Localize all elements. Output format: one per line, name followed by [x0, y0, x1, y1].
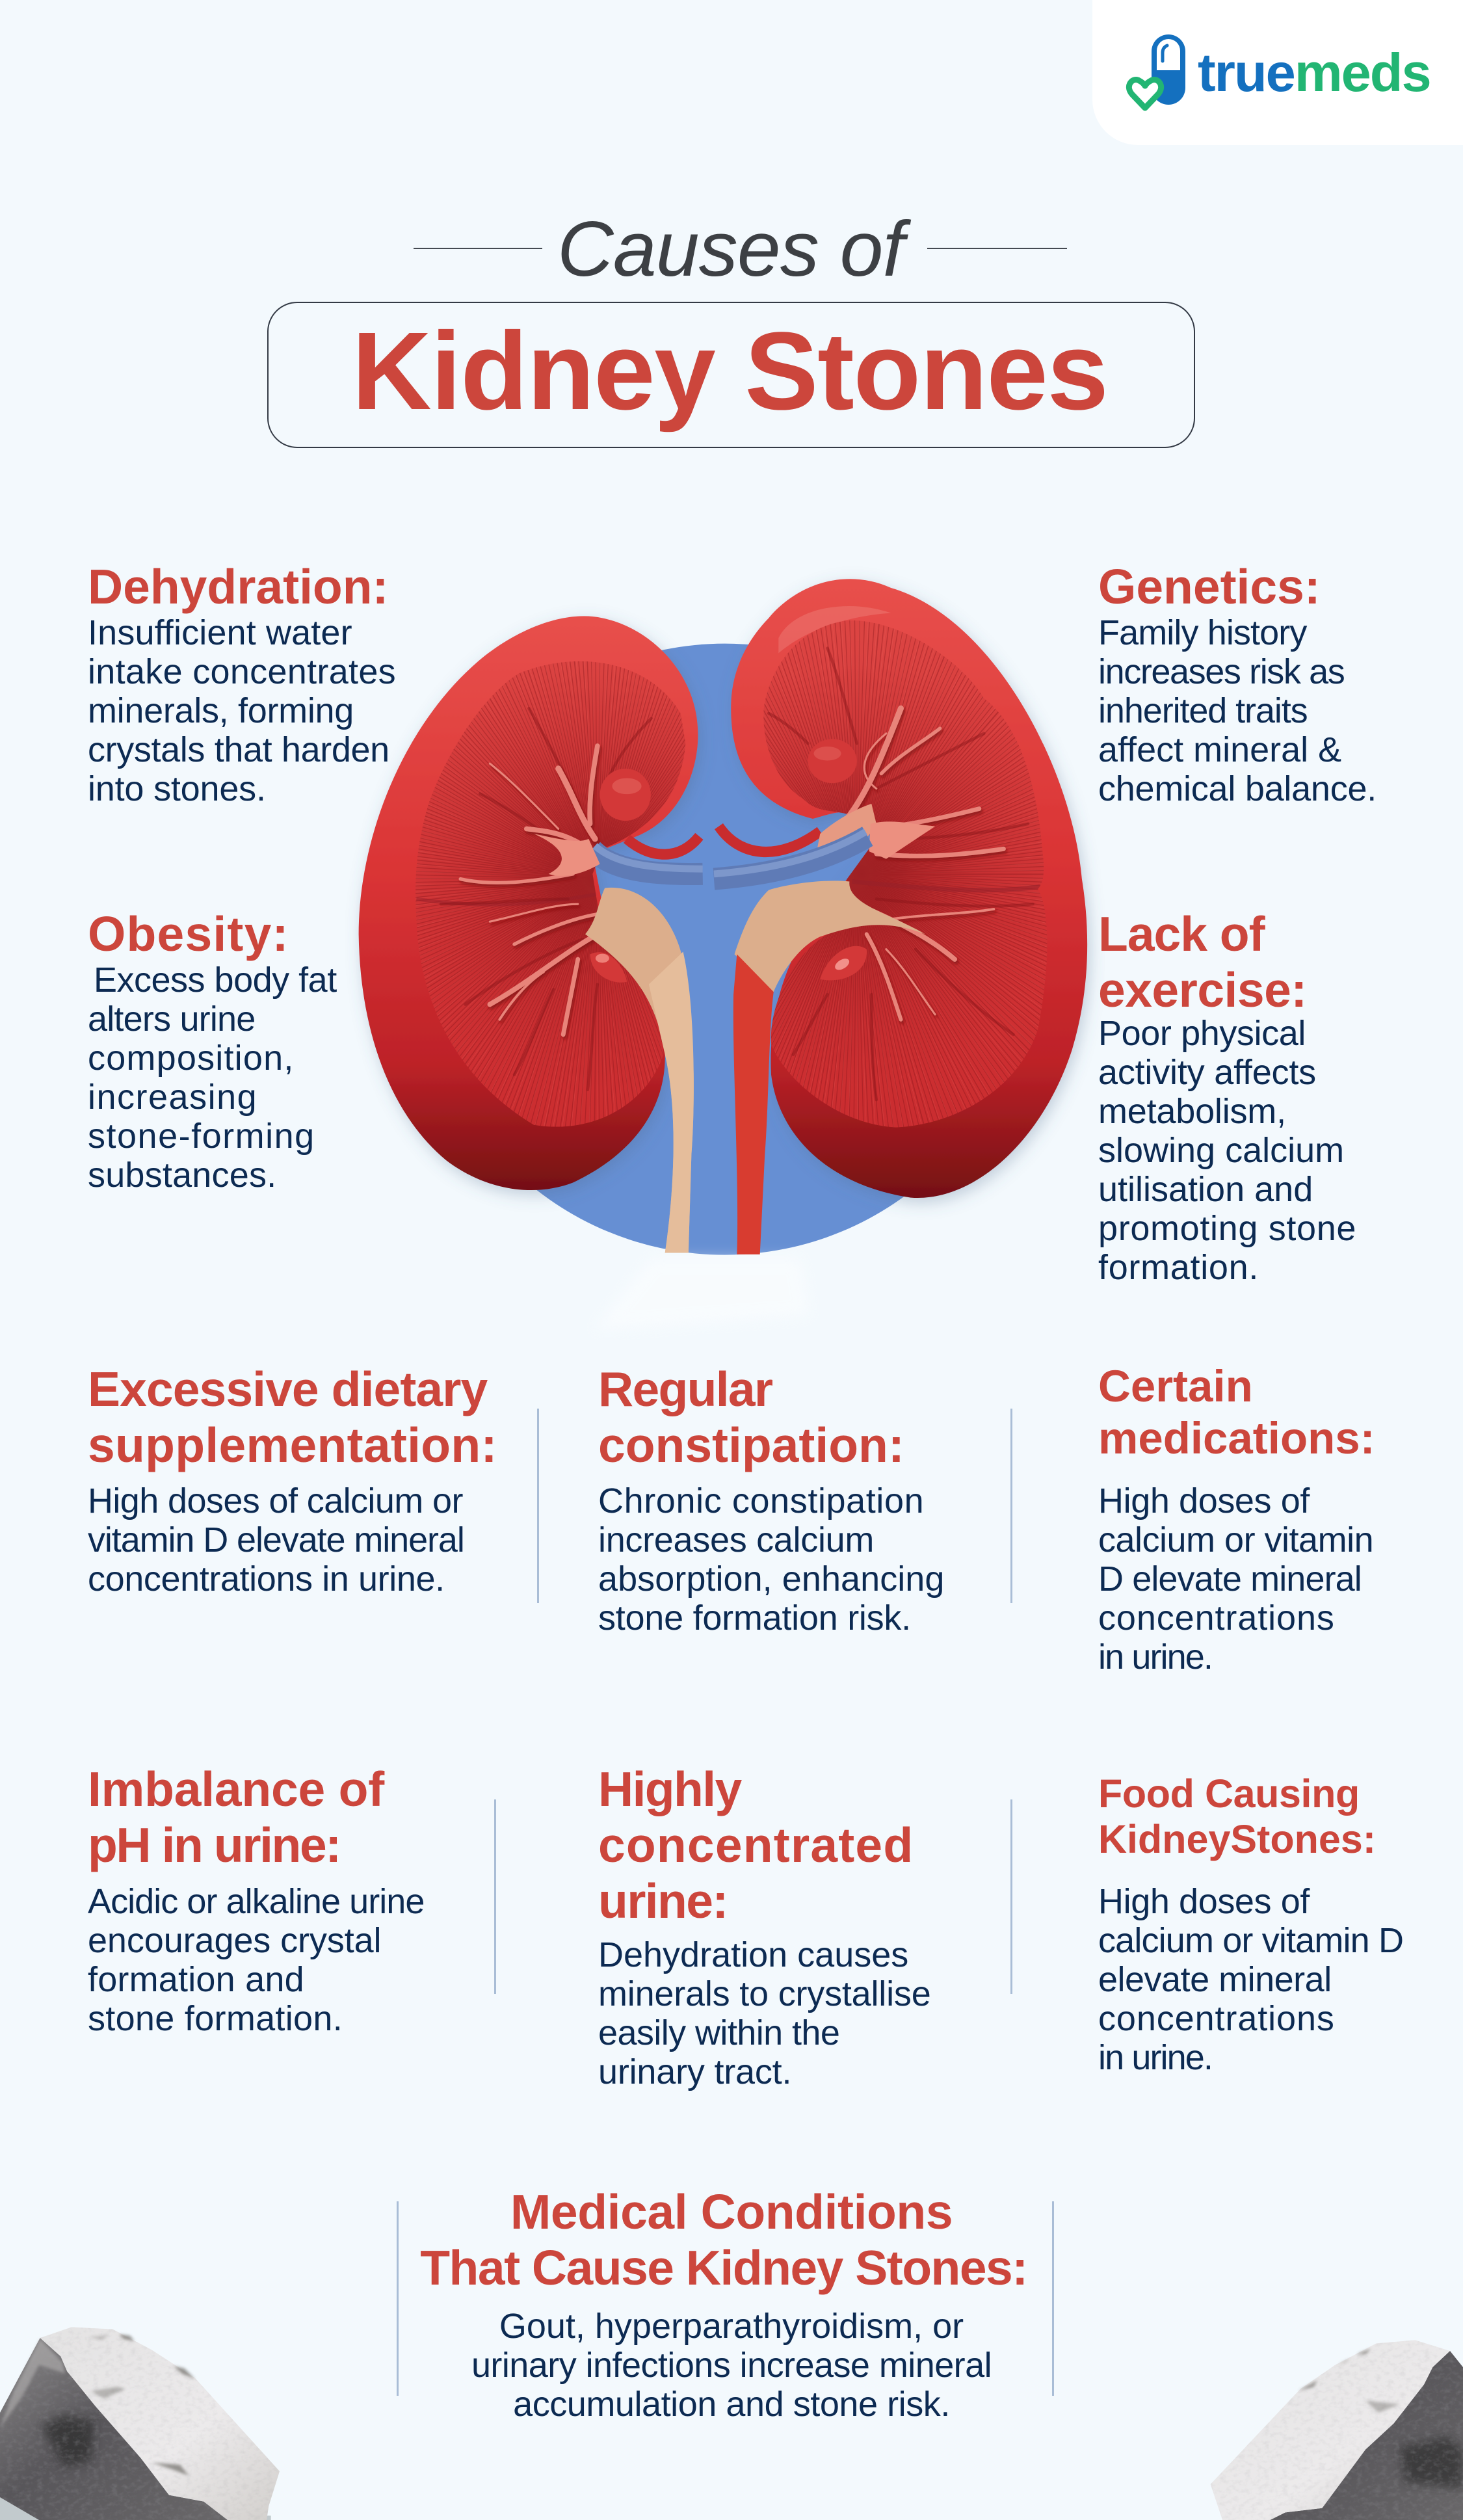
heading: Medical Conditions: [510, 2184, 953, 2239]
body text: High doses of calcium or: [88, 1481, 463, 1520]
heading: Genetics:: [1098, 559, 1321, 614]
body text: accumulation and stone risk.: [513, 2385, 950, 2424]
heading: [403, 2184, 1060, 2296]
panel: Lack of exercise: [1098, 907, 1356, 1287]
left kidney body: [359, 616, 698, 1190]
heading: medications:: [1098, 1413, 1375, 1463]
heading: [88, 1362, 497, 1472]
body text: Dehydration causes: [598, 1935, 908, 1974]
body text: Chronic constipation: [598, 1481, 924, 1520]
right kidney branches: [847, 708, 1003, 1020]
heading: Imbalance of: [88, 1762, 384, 1816]
icon: capsule with heart: [1126, 34, 1185, 111]
body text: easily within the: [598, 2013, 839, 2052]
heading: [598, 1362, 904, 1472]
left calyx highlight: [534, 834, 600, 876]
body text: [88, 1481, 464, 1598]
body text: stone formation risk.: [598, 1598, 911, 1638]
right calyx highlight: [815, 804, 876, 859]
divider: [1052, 2201, 1054, 2396]
body text: calcium or vitamin: [1098, 1520, 1373, 1559]
body text: intake concentrates: [88, 652, 396, 691]
title box: Kidney Stones: [267, 302, 1195, 448]
heading: Lack of: [1098, 907, 1265, 961]
body text: crystals that harden: [88, 730, 389, 769]
body text: Gout, hyperparathyroidism, or: [499, 2307, 964, 2346]
body text: Poor physical: [1098, 1014, 1306, 1053]
logo panel: [1092, 0, 1463, 145]
body text: [598, 1481, 944, 1638]
body text: [88, 961, 337, 1195]
heading: urine:: [598, 1874, 728, 1928]
body text: [598, 1935, 936, 2091]
body text: composition,: [88, 1039, 295, 1078]
image: stone bottom left: [0, 2276, 325, 2520]
heading: [1098, 1361, 1375, 1463]
stone surface marks: [1298, 2349, 1400, 2484]
panel: Obesity: [88, 907, 337, 1195]
body text: inherited traits: [1098, 691, 1308, 730]
panel: Food Causing Kidney Stones: [1098, 1771, 1410, 2077]
body text: increases risk as: [1098, 652, 1344, 691]
right renal vein: [714, 832, 867, 879]
heading: KidneyStones:: [1098, 1817, 1376, 1861]
body text: alters urine: [88, 1000, 256, 1039]
body text: vitamin D elevate mineral: [88, 1520, 464, 1559]
body text: increasing: [88, 1078, 257, 1117]
heading: pH in urine:: [88, 1818, 340, 1872]
body text: stone-forming: [88, 1117, 315, 1156]
heading: [1098, 1771, 1410, 1862]
right kidney papilla bumps: [808, 739, 867, 980]
body text: [88, 1882, 439, 2038]
right kidney: [710, 579, 1087, 1254]
body text: affect mineral &: [1098, 730, 1341, 769]
divider: [494, 1799, 496, 1994]
body text: Insufficient water: [88, 613, 352, 652]
main heading: Kidney Stones: [352, 310, 1108, 433]
body text: urinary infections increase mineral: [471, 2346, 992, 2385]
body text: Excess body fat: [94, 961, 337, 1000]
left kidney cortex: [415, 661, 685, 1126]
title text: Causes of: [557, 206, 904, 293]
panel: Regular constipation: [598, 1362, 944, 1638]
body text: increases calcium: [598, 1520, 874, 1559]
heading: Dehydration:: [88, 559, 389, 614]
left kidney papilla bumps: [590, 769, 651, 983]
body text: minerals, forming: [88, 691, 354, 730]
panel: Medical Conditions: [403, 2184, 1060, 2424]
body text: substances.: [88, 1156, 276, 1195]
heading: [88, 1761, 439, 1873]
panel: Highly concentrated urine: [598, 1761, 936, 2091]
body text: D elevate mineral: [1098, 1559, 1362, 1598]
heading: Food Causing: [1098, 1771, 1360, 1816]
panel: Imbalance of pH in urine: [88, 1761, 439, 2038]
stone light face: [1211, 2340, 1450, 2520]
body text: concentrations: [1098, 1598, 1335, 1638]
body text: utilisation and: [1098, 1170, 1313, 1209]
panel: Certain medications: [1098, 1361, 1375, 1677]
panel: Excessive dietary supplementation: [88, 1362, 497, 1598]
right kidney body: [731, 579, 1087, 1198]
blue circle: [419, 644, 1030, 1255]
body text: High doses of: [1098, 1882, 1310, 1921]
body text: stone formation.: [88, 1999, 343, 2038]
body text: into stones.: [88, 769, 266, 808]
illustration: kidneys on blue circle: [355, 577, 1098, 1255]
body text: [1098, 1014, 1356, 1287]
heading: Highly: [598, 1762, 741, 1816]
stone pale ridge: [0, 2339, 65, 2428]
divider: [397, 2201, 399, 2396]
heading: [598, 1761, 936, 1929]
body text: activity affects: [1098, 1053, 1316, 1092]
logo wordmark: truemeds: [1198, 42, 1430, 103]
divider: [1010, 1799, 1012, 1994]
body text: urinary tract.: [598, 2052, 791, 2091]
divider: [537, 1409, 539, 1603]
body text: slowing calcium: [1098, 1131, 1344, 1170]
heading: That Cause Kidney Stones:: [420, 2240, 1027, 2295]
left renal artery: [627, 836, 699, 855]
body text: in urine.: [1098, 2038, 1212, 2077]
heading: Excessive dietary: [88, 1362, 487, 1416]
body text: calcium or vitamin D: [1098, 1921, 1403, 1960]
heading: supplementation:: [88, 1418, 497, 1472]
body text: minerals to crystallise: [598, 1974, 931, 2013]
body text: formation and: [88, 1960, 304, 1999]
left kidney: [359, 616, 745, 1253]
body text: High doses of: [1098, 1481, 1310, 1520]
body text: [403, 2307, 1060, 2424]
body text: encourages crystal: [88, 1921, 381, 1960]
stone dark face: [1270, 2351, 1463, 2520]
divider: [1010, 1409, 1012, 1603]
heading: exercise:: [1098, 962, 1307, 1017]
body text: metabolism,: [1098, 1092, 1286, 1131]
body text: concentrations: [1098, 1999, 1335, 2038]
body text: promoting stone: [1098, 1209, 1356, 1248]
right renal artery: [718, 827, 820, 852]
heading: Certain: [1098, 1361, 1253, 1411]
body text: in urine.: [1098, 1638, 1212, 1677]
heading: Obesity:: [88, 907, 289, 961]
body text: chemical balance.: [1098, 769, 1377, 808]
right pelvis: [735, 881, 925, 992]
body text: [88, 613, 396, 808]
panel: Dehydration: [88, 559, 396, 808]
body text: elevate mineral: [1098, 1960, 1332, 1999]
heading: [1098, 907, 1307, 1017]
stone shadow: [0, 2497, 271, 2520]
body text: Acidic or alkaline urine: [88, 1882, 424, 1921]
white glow below circle: [592, 1258, 810, 1331]
left ureter: [585, 888, 694, 1253]
body text: absorption, enhancing: [598, 1559, 944, 1598]
right ureter: [733, 954, 774, 1254]
left kidney fissures: [441, 708, 652, 1090]
left kidney branches: [460, 746, 602, 1035]
right kidney top highlight: [778, 606, 891, 653]
stone surface marks: [89, 2334, 195, 2476]
left renal vein: [592, 846, 703, 874]
body text: [1098, 1882, 1410, 2077]
title rule right: [927, 248, 1067, 249]
body text: Family history: [1098, 613, 1306, 652]
right kidney fissures: [769, 648, 1033, 1100]
body text: concentrations in urine.: [88, 1559, 445, 1598]
panel: Genetics: [1098, 559, 1377, 808]
body text: [1098, 1481, 1384, 1677]
heading: concentrated: [598, 1818, 914, 1872]
body text: formation.: [1098, 1248, 1259, 1287]
stone dark face: [0, 2338, 228, 2520]
right kidney cortex: [763, 620, 1047, 1128]
heading: constipation:: [598, 1418, 904, 1472]
stone light face: [40, 2327, 280, 2520]
heading: Regular: [598, 1362, 772, 1416]
body text: [1098, 613, 1377, 808]
title rule left: [414, 248, 542, 249]
image: stone bottom right: [1170, 2276, 1463, 2520]
